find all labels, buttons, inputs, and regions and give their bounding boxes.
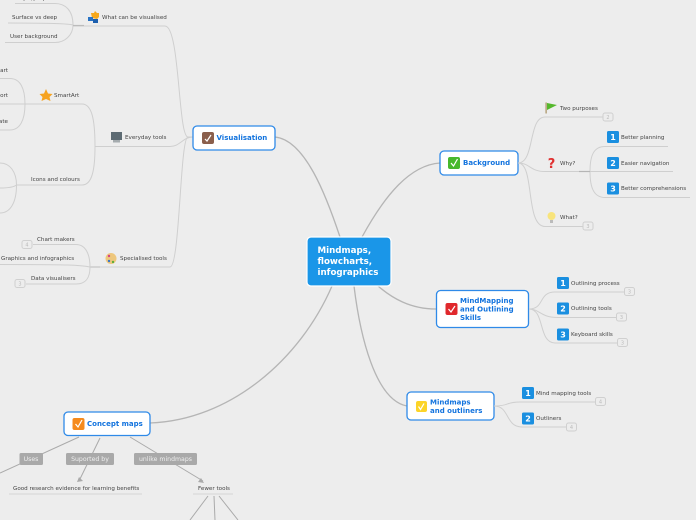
label: Skills [460,314,481,322]
icon: 2 [522,412,534,424]
central title: Mindmaps, [318,246,371,256]
tag: Uses: Uses [24,456,38,463]
badge [618,338,628,346]
icon: bulb [548,212,556,223]
label: data visualisers: Data visualisers [31,276,76,282]
badge [624,288,634,296]
icon: 1 [522,387,534,399]
node: Concept maps with links [0,412,238,520]
icon: red check [446,303,458,315]
badge: 4 [570,425,573,431]
label: and Outlining [460,306,514,314]
icon: 3 [607,182,619,194]
badge: 3 [620,315,623,321]
icon: question mark: ? [548,157,555,172]
badge: 3 [586,224,590,230]
icon: 3: 3 [560,330,566,340]
label: Two purposes [559,106,598,112]
badge: 2 [606,115,610,121]
icon: brown check [202,132,214,144]
arrowhead left [77,477,83,482]
label: Visualisation [216,134,267,142]
label: Background [463,159,510,167]
icon: orange check [72,418,84,430]
label: Better planning [621,135,665,141]
branch: specialised tools [0,137,193,288]
node: Mindmaps and outliners with branches [407,387,606,431]
tag: Suported by: Suported by [71,456,109,463]
central title: flowcharts, [318,257,372,267]
icon: 3 [557,328,569,340]
icon: 1: 1 [610,133,616,142]
label: Why? [560,161,575,167]
icon: flag [546,102,557,114]
node: Background with branches [440,102,690,230]
label: Concept maps [87,420,143,428]
label: MindMapping [460,297,513,305]
label: everyday tools: Everyday tools [125,135,167,141]
badge [566,423,576,431]
badge [616,313,626,321]
label: chart makers: Chart makers [37,237,75,243]
label: fewer tools: Fewer tools [198,486,230,492]
label: Better comprehensions [621,186,686,192]
tag: Suported by [66,453,114,465]
icon: 1: 1 [525,389,531,398]
badge [596,398,606,406]
tag: unlike mindmaps [134,453,197,465]
label: Outlining tools [571,306,612,312]
label: Mind mapping tools [536,391,591,397]
icon: 2 [607,157,619,169]
icon: 1 [557,277,569,289]
label: and outliners [430,407,482,415]
node: Visualisation [193,126,275,150]
icon: puzzle pieces [88,11,99,23]
label: Mindmaps [430,398,471,406]
label: Keyboard skills [571,332,613,338]
label: user background: User background [10,34,58,40]
branch: everyday tools [0,68,193,213]
badge: 4 [599,400,602,406]
icon: star [40,89,52,101]
label: Outliners [536,416,562,422]
tag: Uses [20,453,43,465]
label: graphics and infographics: Graphics and infographics [1,256,74,262]
badge: 3 [15,280,25,288]
icon: 2 [557,302,569,314]
badge [603,113,613,121]
icon: 2: 2 [610,159,616,168]
node: MindMapping and Outlining Skills with branches [436,277,634,346]
label: What? [560,215,578,221]
label: ort: ort [0,93,9,99]
label: icons and colours: Icons and colours [31,177,80,183]
badge: 4: 4 [25,242,29,248]
icon: monitor [111,132,122,142]
badge: 3: 3 [18,282,22,288]
label: Easier navigation [621,161,670,167]
badge: 3 [628,290,631,296]
tag: unlike mindmaps: unlike mindmaps [139,456,192,463]
label: specialised tools: Specialised tools [120,256,167,262]
label: SmartArt: SmartArt [54,93,80,99]
arrowhead right [198,478,204,483]
icon: green check [448,157,460,169]
central title: infographics [318,268,378,278]
label: surface vs deep: Surface vs deep [12,15,58,21]
branch: what can be visualised [5,0,193,137]
label: research evidence: Good research evidence for learning benefits [13,486,139,492]
label: what can be visualised: What can be visualised [102,15,167,21]
label: art: art [0,68,9,74]
central node [307,237,391,286]
main connectors [150,137,440,423]
icon: 1: 1 [560,279,566,288]
icon: palette [106,253,116,264]
badge: 3 [621,340,624,346]
icon: 2: 2 [560,304,566,314]
badge: 4 [22,240,32,248]
icon: 1 [607,131,619,143]
label: Outlining process [571,281,620,287]
icon: 2: 2 [525,414,531,424]
icon: yellow check [416,401,427,412]
icon: 3: 3 [610,184,616,194]
badge [583,222,593,230]
